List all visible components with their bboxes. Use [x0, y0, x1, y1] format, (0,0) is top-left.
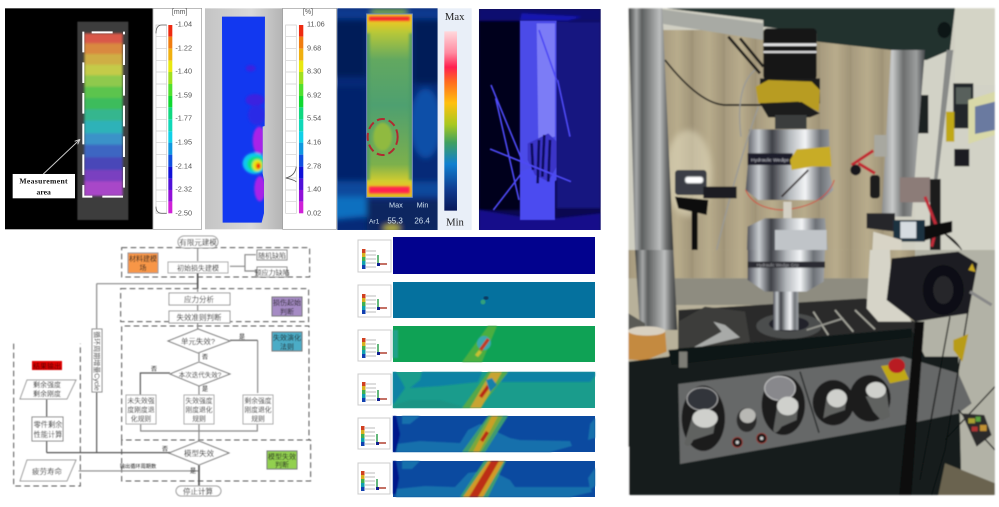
damage module label: 损伤起始 — [273, 298, 301, 307]
strain scale values — [307, 20, 325, 217]
branch marks: 是 — [190, 468, 196, 475]
left column — [628, 8, 673, 250]
strain scale values: 11.06 — [307, 20, 325, 29]
model failure module label: 模型失效 — [268, 452, 296, 461]
FE contour plot 5 — [358, 416, 595, 452]
rule box: residual: 剩余强度 — [244, 396, 272, 405]
rule box: residual — [243, 395, 273, 424]
displacement colour bands — [84, 33, 123, 196]
white notch — [625, 447, 629, 497]
FE contour plot 3 — [358, 326, 595, 362]
FE contour plot 2 — [358, 282, 595, 318]
rule box: unfailed: 未失效强 — [127, 396, 155, 405]
damage module label: 判断 — [280, 307, 294, 316]
left camera and light — [675, 170, 737, 250]
displacement scale values: -2.32 — [175, 185, 192, 194]
decision: element failed: 单元失效? — [181, 336, 215, 346]
callout: measurement area — [13, 174, 75, 198]
FE contour plot 1 — [358, 237, 595, 274]
branch marks: 否 — [151, 366, 157, 373]
displacement scale values: -1.40 — [175, 67, 192, 76]
rule box: residual: 规则 — [251, 414, 265, 423]
displacement scale values: -2.14 — [175, 161, 192, 170]
strain scale values: 9.68 — [307, 43, 321, 52]
failure criterion box — [169, 311, 230, 323]
panel: strain field contour — [205, 8, 283, 229]
legend: thermal Max to Min colour bar: Min — [446, 218, 465, 229]
callout: measurement area: Measurement — [19, 176, 68, 185]
damage module label — [272, 297, 302, 316]
upper wedge grip — [746, 129, 833, 200]
random defect box — [257, 250, 287, 260]
table top — [678, 298, 918, 350]
thermal readout values: 55.3 — [387, 216, 403, 225]
analysis box outline — [367, 14, 412, 197]
right camera on stand — [867, 177, 962, 250]
rule box: failed — [184, 395, 214, 424]
displacement scale values: -1.59 — [175, 90, 192, 99]
right wall with devices — [915, 8, 995, 250]
emergency stop button — [881, 358, 909, 383]
red clamp arm — [850, 135, 887, 198]
displacement scale values: -1.04 — [175, 20, 192, 29]
hot spot dashed ellipse — [368, 119, 398, 155]
strain scale values: 6.92 — [307, 90, 321, 99]
plot legend 5 — [358, 418, 390, 449]
strain scale values: 4.16 — [307, 138, 321, 147]
failure criterion box: 失效准则判断 — [176, 312, 222, 322]
preload defect box: 预应力缺陷 — [254, 268, 290, 277]
FE contour plot 4 — [358, 372, 595, 408]
plot legend 1 — [358, 240, 391, 272]
model failure module label — [267, 451, 297, 469]
tape roll — [628, 326, 667, 361]
load cell — [760, 28, 820, 103]
yellow warning label — [953, 334, 968, 362]
evolution module label: 失效演化 — [273, 333, 301, 342]
legend: strain scale in percent: [%] — [303, 9, 313, 16]
gauge and valve 1 — [682, 386, 725, 451]
actuator shaft — [773, 288, 798, 330]
yellow tape on grip — [790, 147, 832, 170]
random defect box: 随机缺陷 — [258, 251, 286, 260]
material module label: 场 — [140, 263, 146, 272]
decision: model failed: 模型失效 — [184, 448, 214, 458]
fatigue life output: 疲劳寿命 — [32, 466, 62, 476]
vertical cycle increment box: 循环周期增量Cycle — [92, 331, 102, 391]
displacement colour bar — [168, 25, 172, 213]
branch marks: 否 — [162, 446, 168, 453]
residual performance box: 零件剩余 — [34, 420, 63, 429]
stress analysis box: 应力分析 — [184, 294, 214, 304]
remote handset — [962, 413, 992, 447]
callout: measurement area: area — [36, 188, 51, 197]
thermal readout values: Min — [417, 200, 428, 209]
residual strength output: 剩余刚度 — [33, 389, 61, 398]
strain scale values: 1.40 — [307, 185, 321, 194]
stop node — [176, 486, 221, 496]
specimen — [783, 202, 792, 218]
branch marks: 是 — [202, 386, 208, 393]
thermal readout values: Ar1 — [369, 218, 380, 225]
legend: strain scale in percent — [283, 8, 337, 229]
small knob — [737, 408, 757, 432]
strain scale values: 0.02 — [307, 208, 321, 217]
left column lower — [635, 250, 677, 330]
rule box: failed: 失效强度 — [185, 396, 213, 405]
branch marks: 否 — [202, 354, 208, 361]
strain scale values: 8.30 — [307, 67, 321, 76]
residual performance box: 性能计算 — [34, 430, 62, 439]
legend: displacement scale in mm — [153, 8, 202, 229]
flowchart: progressive damage analysis — [14, 246, 311, 486]
legend: thermal Max to Min colour bar — [438, 8, 472, 230]
model failure module label: 判断 — [275, 460, 289, 469]
panel indicator dials — [732, 433, 767, 447]
black flange — [760, 102, 820, 117]
top cross beam — [667, 8, 955, 60]
results output label — [32, 361, 62, 370]
thermal readout values: Max — [389, 200, 403, 209]
legend: displacement scale in mm: [mm] — [172, 9, 187, 16]
decision: element failed — [168, 329, 230, 353]
panel: test machine photograph: Hydraulic Wedge — [751, 157, 789, 163]
red sensor wires and cables — [746, 180, 834, 210]
rule box: residual: 刚度退化 — [244, 405, 272, 414]
broken fibre strands — [490, 30, 571, 210]
rule box: unfailed — [126, 395, 156, 424]
output cycles note: 输出循环周期数 — [120, 462, 157, 470]
displacement scale values: -2.50 — [175, 208, 192, 217]
projector lamp — [887, 252, 992, 322]
evolution module label — [272, 332, 302, 351]
thermal readout values — [369, 200, 430, 225]
strain colour bar — [299, 25, 303, 213]
right column — [882, 50, 925, 217]
branch marks: 是 — [239, 334, 245, 341]
displacement scale values — [175, 20, 192, 217]
control panel plate — [678, 357, 972, 464]
flowchart nodes and labels — [20, 236, 302, 496]
rule box: failed: 规则 — [192, 414, 206, 423]
lower grip top — [747, 218, 828, 250]
panel: displacement field with measurement area — [5, 8, 153, 229]
tripod stand — [899, 322, 924, 495]
crack shadow streaks — [532, 135, 550, 183]
stress analysis box — [169, 293, 230, 305]
material module label — [128, 253, 158, 273]
panel: test machine photograph — [625, 0, 999, 497]
yellow tape top — [756, 80, 820, 112]
strain scale values: 2.78 — [307, 161, 321, 170]
plot legend 3 — [358, 330, 391, 361]
displacement scale values: -1.22 — [175, 43, 192, 52]
residual strength output: 剩余强度 — [33, 380, 61, 389]
FE contour plot 6 — [358, 461, 595, 497]
rule box: unfailed: 化规则 — [131, 414, 151, 423]
valve 4 — [849, 375, 891, 422]
photo background — [628, 8, 995, 250]
white wrapped stand — [867, 250, 912, 322]
residual performance box — [32, 417, 63, 441]
strain scale values: 5.54 — [307, 114, 321, 123]
measurement frame — [83, 32, 124, 197]
plot legend 4 — [358, 374, 391, 405]
lower photo background — [628, 250, 995, 495]
displacement scale values: -1.95 — [175, 138, 192, 147]
decision: iteration failed: 本次迭代失效? — [179, 370, 222, 379]
results output label: 结果输出 — [33, 362, 61, 370]
displacement scale values: -1.77 — [175, 114, 192, 123]
specimen grey surround — [77, 22, 128, 220]
legend: thermal Max to Min colour bar: Max — [445, 12, 465, 23]
thermal readout values: 26.4 — [414, 216, 430, 225]
vertical cycle increment box — [92, 329, 102, 392]
branch marks — [151, 334, 245, 475]
rule box: unfailed: 度刚度退 — [127, 405, 155, 414]
valve 3 — [813, 380, 854, 425]
gauge and valve 2 — [762, 375, 805, 435]
stop node: 停止计算 — [183, 486, 213, 496]
initial damage box — [168, 262, 228, 273]
evolution module label: 法则 — [280, 342, 294, 351]
panel: infrared thermal image — [337, 8, 438, 230]
dashed module frames — [14, 248, 311, 486]
rule box: failed: 刚度退化 — [185, 405, 213, 414]
panel: failed specimen under blue light — [479, 9, 601, 233]
residual strength output — [20, 380, 76, 399]
decision: iteration failed — [170, 362, 230, 386]
initial damage box: 初始损失建模 — [177, 264, 219, 272]
machine body — [628, 330, 962, 495]
floor — [938, 463, 995, 495]
panel: test machine photograph: Hydraulic Wedge Grip — [757, 262, 800, 267]
base disc — [756, 313, 822, 339]
start node: 有限元建模 — [179, 237, 217, 247]
material module label: 材料建模 — [129, 254, 157, 263]
decision: model failed — [169, 441, 229, 465]
lower wedge grip — [748, 250, 825, 292]
fatigue life output — [20, 460, 76, 481]
arrow to measurement area — [43, 139, 80, 174]
connector lines — [79, 246, 258, 471]
plot legend 2 — [358, 285, 391, 317]
plot legend 6 — [358, 463, 390, 494]
